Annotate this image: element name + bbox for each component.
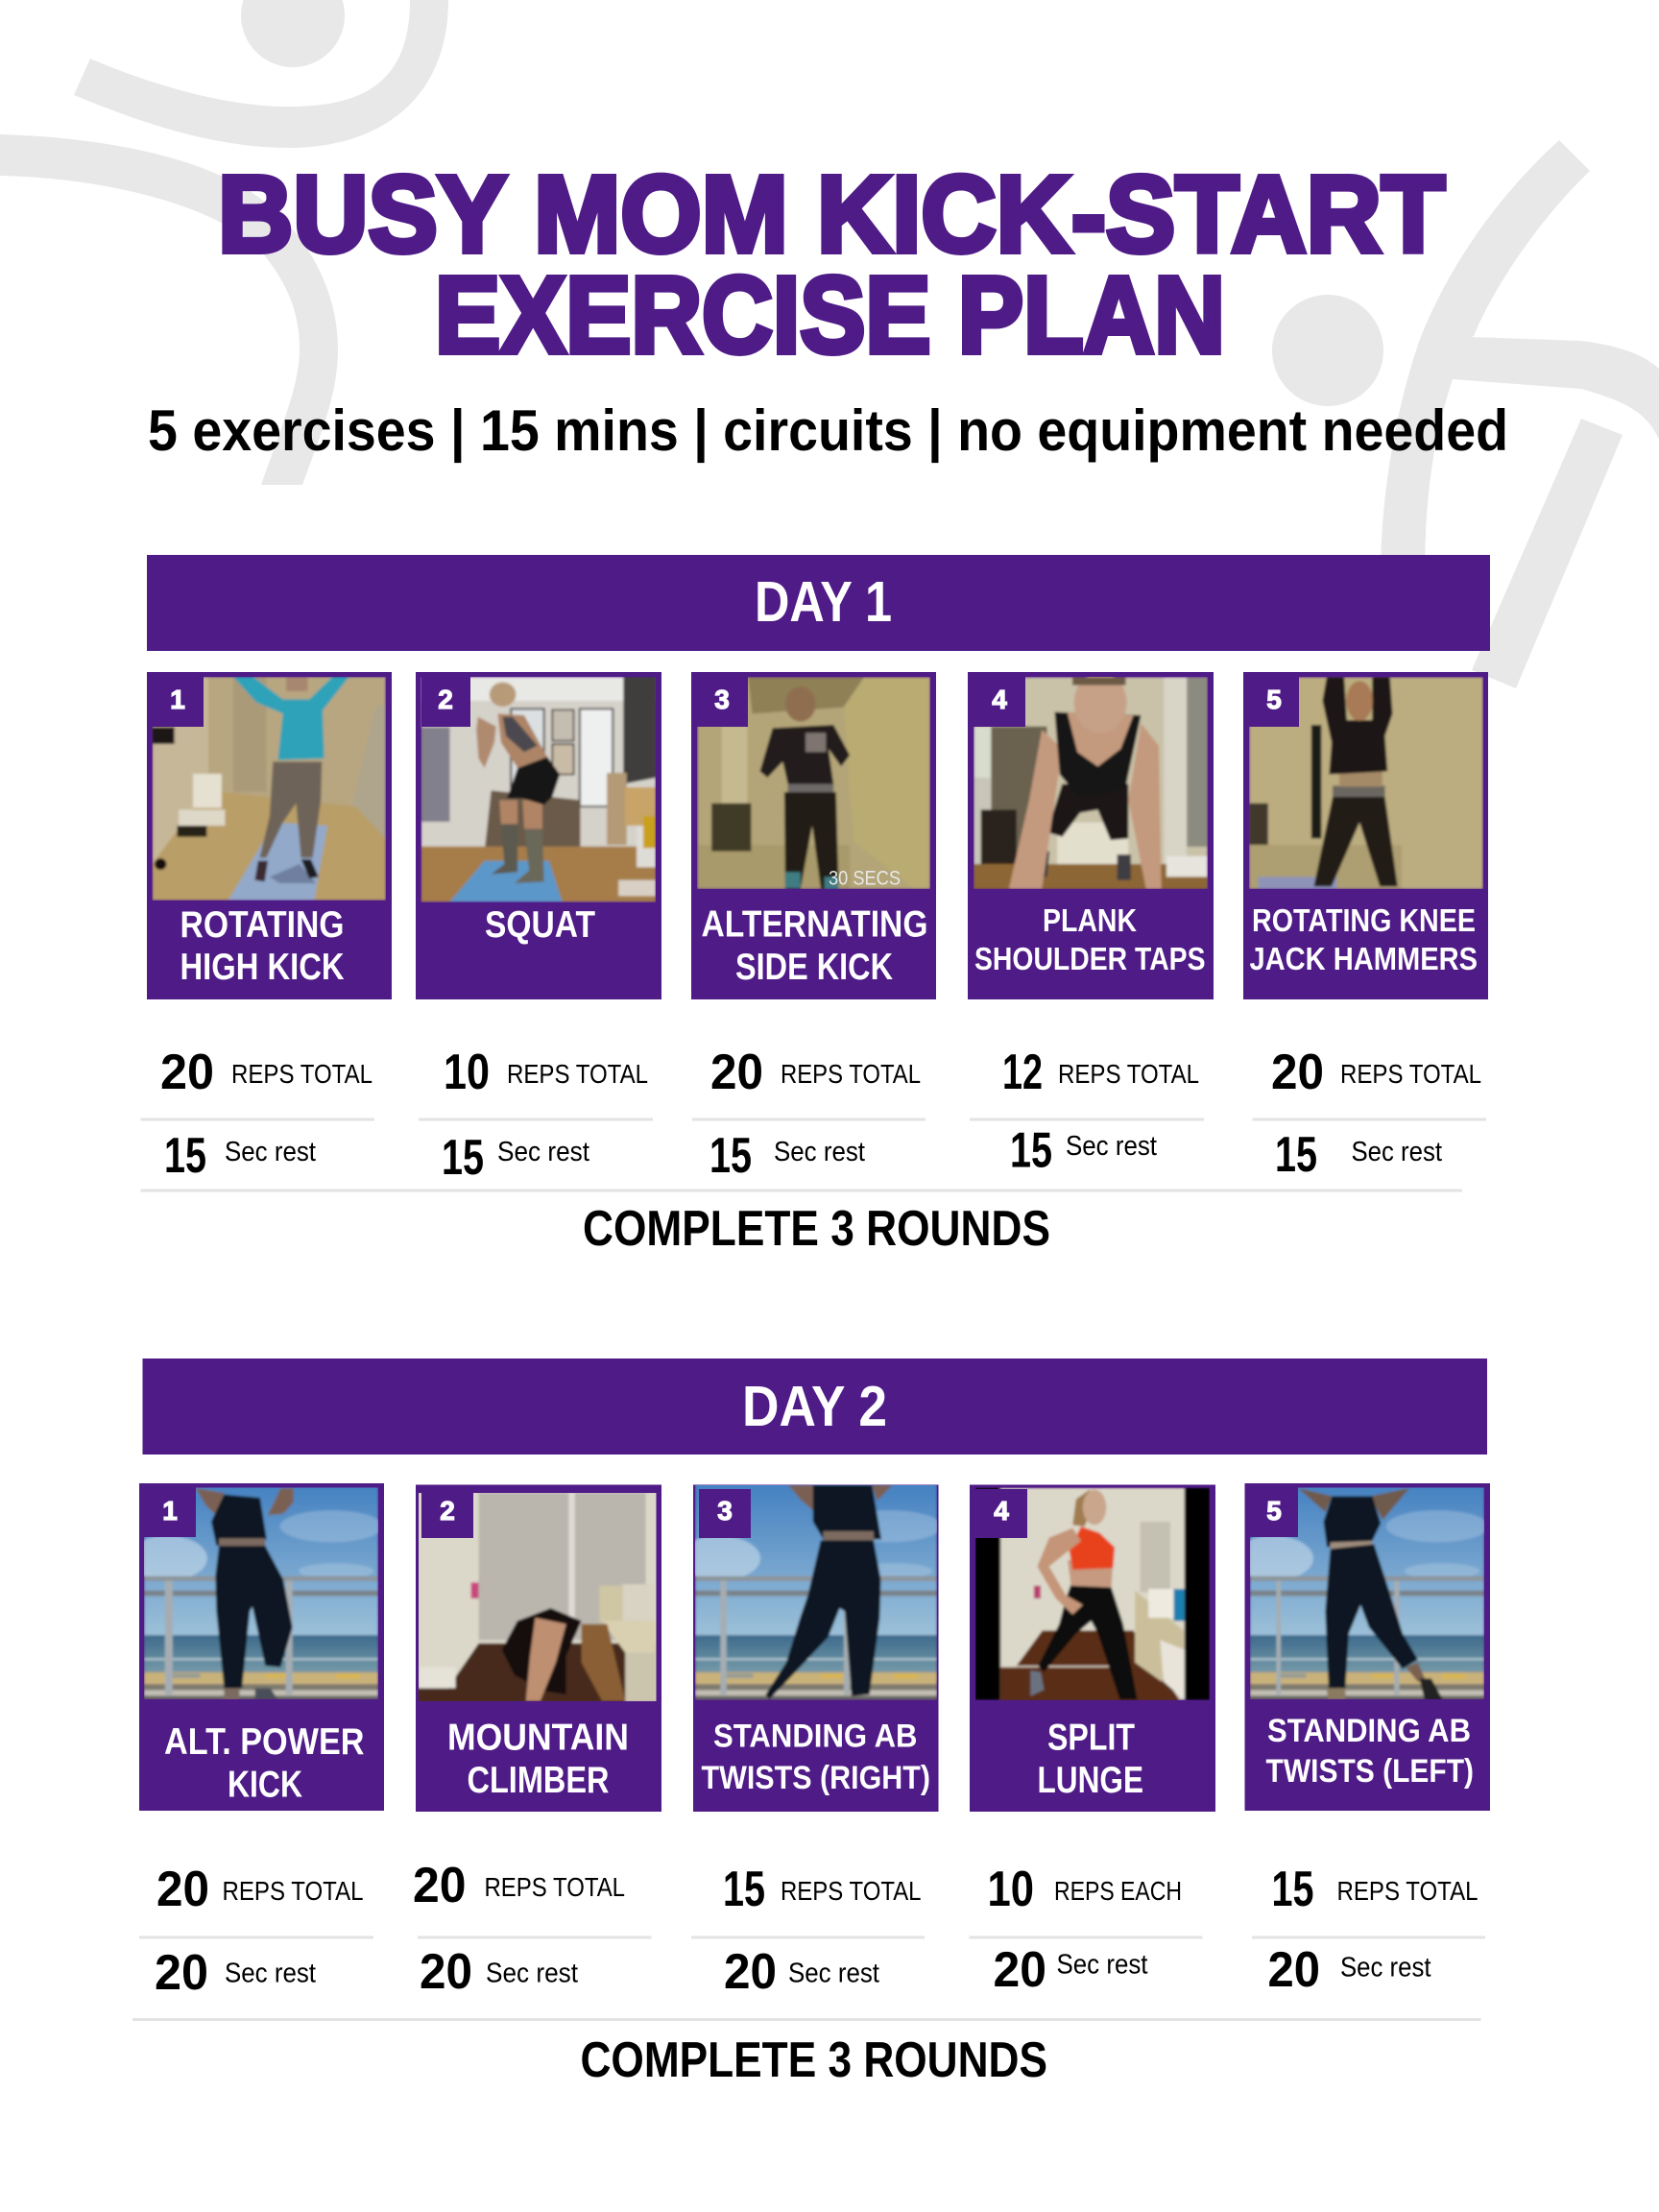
badge: 2: 2 [438, 685, 453, 714]
label: split lunge: LUNGE [1037, 1760, 1143, 1801]
day 2 stats: exercise 4: 10 [987, 1862, 1034, 1917]
day 2 stats: exercise 5: 15 [1271, 1862, 1313, 1917]
day 2 stats: exercise 1: REPS TOTAL [223, 1876, 363, 1906]
label: standing ab twists left: TWISTS (LEFT) [1265, 1753, 1474, 1790]
day 1 card 3: alternating side kick [691, 672, 936, 999]
title: EXERCISE PLAN [435, 254, 1225, 375]
day 2 stats: exercise 1: 20 [156, 1862, 209, 1917]
day 1 stats: exercise 1: 20 [160, 1045, 214, 1100]
day 1 stats: exercise 4 [970, 1045, 1204, 1179]
day 2 stats: exercise 1 [139, 1862, 373, 2001]
badge: 4 [974, 677, 1025, 727]
photo: rotating high kick [153, 677, 386, 901]
title [218, 154, 1445, 375]
day 1 card 5: rotating knee jack hammers [1243, 672, 1488, 999]
badge: 1 [144, 1488, 196, 1537]
badge: 4: 4 [992, 685, 1007, 714]
background figure: top left [0, 0, 448, 485]
day 2 stats: exercise 2: 20 [413, 1858, 467, 1913]
badge: 3: 3 [717, 1496, 733, 1526]
day 2 stats: exercise 2: 20 [420, 1944, 472, 2000]
badge: 3 [697, 677, 748, 727]
photo: alt. power kick [144, 1488, 378, 1699]
day 1 stats: exercise 4: REPS TOTAL [1058, 1059, 1199, 1089]
photo: standing ab twists left [1250, 1488, 1484, 1699]
label: standing ab twists left [1265, 1713, 1474, 1790]
day 2 card 5: standing ab twists left [1234, 1475, 1490, 1811]
day 1 card 4: plank shoulder taps [968, 672, 1214, 999]
day 2 stats: exercise 5: Sec rest [1340, 1953, 1431, 1984]
day 1 stats: exercise 3: 20 [710, 1045, 763, 1100]
label: standing ab twists right [701, 1719, 930, 1796]
day 2 card 1: alt. power kick [128, 1475, 384, 1811]
day 1 stats: exercise 2: 10 [444, 1045, 490, 1100]
photo: squat [421, 677, 656, 902]
day 2 stats: exercise 5: REPS TOTAL [1336, 1876, 1479, 1906]
day 1 card 2: squat [416, 672, 661, 999]
day 2 banner: DAY 2 [742, 1375, 887, 1438]
label: alt. power kick [164, 1721, 365, 1805]
label: rotating high kick: ROTATING [180, 904, 344, 946]
day 1 stats: exercise 2: Sec rest [497, 1137, 589, 1167]
day 1 stats: exercise 3 [692, 1045, 926, 1184]
day 1 card 1: rotating high kick [147, 672, 392, 999]
day 1 stats: exercise 1: REPS TOTAL [231, 1059, 373, 1089]
day 1 stats: exercise 4: Sec rest [1066, 1131, 1157, 1162]
day 2 stats: exercise 1: 20 [155, 1945, 208, 2001]
label: alternating side kick: SIDE KICK [735, 947, 893, 988]
label: split lunge: SPLIT [1047, 1717, 1135, 1759]
day 2 card 3: standing ab twists right [678, 1475, 942, 1812]
day 2 banner [142, 1358, 1487, 1455]
day 1 stats: exercise 3: Sec rest [774, 1137, 865, 1167]
day 2 card 2: mountain climber [416, 1484, 661, 1812]
badge: 3: 3 [714, 685, 730, 714]
label: rotating high kick [180, 904, 344, 988]
day 1 stats: exercise 5: 15 [1275, 1127, 1317, 1183]
photo: standing ab twists right [695, 1485, 937, 1700]
label: rotating knee jack hammers [1250, 902, 1478, 976]
day 1 stats: exercise 3: 15 [709, 1128, 752, 1184]
label: rotating knee jack hammers: ROTATING KNEE [1252, 902, 1476, 938]
label: rotating knee jack hammers: JACK HAMMERS [1250, 941, 1478, 976]
label: plank shoulder taps [974, 902, 1206, 976]
background figure: right [1272, 140, 1659, 688]
day 1 stats: exercise 5: REPS TOTAL [1340, 1059, 1481, 1089]
day 2 stats: exercise 3: REPS TOTAL [781, 1876, 922, 1906]
day 2 stats: exercise 3: Sec rest [788, 1959, 879, 1989]
label: plank shoulder taps: PLANK [1043, 902, 1137, 938]
day 1 banner [147, 555, 1490, 651]
label: standing ab twists left: STANDING AB [1267, 1713, 1471, 1749]
day 1 stats: exercise 3: REPS TOTAL [781, 1059, 921, 1089]
label: mountain climber: MOUNTAIN [447, 1717, 629, 1759]
badge: 5: 5 [1266, 1496, 1282, 1526]
subtitle: 5 exercises | 15 mins | circuits | no equipment needed [148, 398, 1508, 464]
day 2 rounds note: COMPLETE 3 ROUNDS [580, 2032, 1047, 2088]
day 1 stats: exercise 2: REPS TOTAL [507, 1059, 648, 1089]
day 1 stats: exercise 4: 15 [1010, 1123, 1052, 1179]
label: plank shoulder taps: SHOULDER TAPS [974, 941, 1206, 976]
label: standing ab twists right: STANDING AB [713, 1719, 918, 1755]
badge: 5 [1249, 677, 1299, 727]
day 2 stats: exercise 2: Sec rest [486, 1959, 578, 1989]
badge: 1 [152, 677, 204, 727]
day 1 stats: exercise 2: 15 [442, 1130, 484, 1186]
day 1 stats: exercise 2 [419, 1045, 653, 1186]
day 2 stats: exercise 3: 20 [724, 1944, 777, 2000]
day 2 stats: exercise 4: 20 [993, 1942, 1046, 1998]
day 1 stats: exercise 1: 15 [164, 1128, 206, 1184]
badge: 4 [975, 1489, 1027, 1538]
day 2 stats: exercise 5 [1252, 1862, 1485, 1998]
timer text: 30 secs: 30 SECS [829, 868, 901, 889]
day 1 banner: DAY 1 [755, 570, 892, 634]
label: alt. power kick: KICK [228, 1765, 302, 1805]
label: squat: SQUAT [485, 904, 595, 946]
badge: 1: 1 [162, 1496, 178, 1526]
day 2 stats: exercise 2 [413, 1858, 651, 2000]
day 1 stats: exercise 5: Sec rest [1352, 1137, 1442, 1167]
label: alternating side kick [701, 904, 927, 988]
label: alt. power kick: ALT. POWER [164, 1721, 365, 1763]
photo: rotating knee jack hammers [1249, 677, 1483, 889]
day 1 stats: exercise 5: 20 [1271, 1045, 1324, 1100]
badge: 2: 2 [440, 1496, 455, 1526]
photo: alternating side kick [697, 677, 930, 889]
photo: mountain climber [417, 1491, 659, 1702]
day 2 stats: exercise 3 [691, 1862, 925, 2000]
title: BUSY MOM KICK-START [218, 154, 1445, 275]
badge: 2 [421, 677, 470, 727]
badge: 1: 1 [170, 685, 185, 714]
label: standing ab twists right: TWISTS (RIGHT) [701, 1760, 930, 1796]
day 2 stats: exercise 2: REPS TOTAL [484, 1872, 625, 1902]
photo: plank shoulder taps [974, 672, 1208, 889]
day 2 stats: exercise 3: 15 [723, 1862, 765, 1917]
day 1 stats: exercise 1 [140, 1045, 374, 1184]
day 1 stats: exercise 1: Sec rest [225, 1137, 316, 1167]
day 1 stats: exercise 4: 12 [1002, 1045, 1043, 1100]
badge: 4: 4 [994, 1496, 1009, 1526]
photo: split lunge [975, 1488, 1210, 1701]
badge: 5: 5 [1266, 685, 1282, 714]
day 2 stats: exercise 1: Sec rest [225, 1959, 316, 1989]
label: split lunge [1037, 1717, 1143, 1801]
day 2 stats: exercise 4: REPS EACH [1054, 1876, 1182, 1906]
label: mountain climber [447, 1717, 629, 1801]
day 1 rounds note: COMPLETE 3 ROUNDS [583, 1201, 1050, 1257]
badge: 5 [1250, 1488, 1298, 1537]
label: rotating high kick: HIGH KICK [180, 947, 344, 988]
day 2 stats: exercise 4 [970, 1862, 1202, 1998]
day 1 stats: exercise 5 [1252, 1045, 1486, 1183]
badge: 2 [421, 1493, 473, 1538]
day 2 card 4: split lunge [970, 1484, 1215, 1812]
badge: 3 [699, 1489, 751, 1538]
day 2 stats: exercise 4: Sec rest [1056, 1949, 1148, 1980]
label: alternating side kick: ALTERNATING [701, 904, 927, 945]
day 2 stats: exercise 5: 20 [1267, 1942, 1320, 1998]
label: mountain climber: CLIMBER [467, 1760, 609, 1801]
